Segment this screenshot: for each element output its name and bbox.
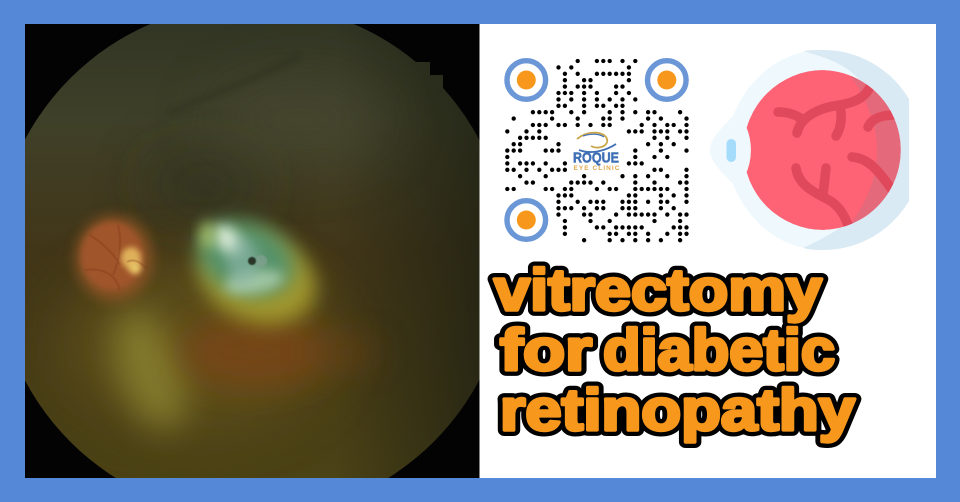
title outline: diabetic xyxy=(603,318,835,383)
title outline: for xyxy=(500,318,592,383)
optic disc xyxy=(75,215,153,301)
QR finder: bottom left xyxy=(507,201,546,239)
QR code xyxy=(507,61,686,240)
Roque Eye Clinic logo xyxy=(571,130,622,172)
yellow haze xyxy=(99,301,201,439)
title fill: retinopathy xyxy=(500,378,855,443)
title outline: retinopathy xyxy=(500,378,855,443)
title fill: diabetic xyxy=(603,318,835,383)
QR data dots xyxy=(507,61,686,240)
dark retinal vessel xyxy=(170,55,300,112)
Roque Eye Clinic logo: EYE CLINIC xyxy=(574,165,620,172)
title fill xyxy=(494,258,855,443)
panel: white content area xyxy=(480,24,936,478)
panel: fundus photograph xyxy=(25,24,480,478)
Roque Eye Clinic logo: ROQUE xyxy=(573,150,619,166)
icon: eye with retinal vessels xyxy=(710,50,923,250)
title fill: for xyxy=(500,318,592,383)
title outline: vitrectomy xyxy=(494,258,822,323)
QR finder: top right xyxy=(648,61,686,99)
title fill: vitrectomy xyxy=(494,258,822,323)
retina xyxy=(746,70,901,230)
title outline xyxy=(494,258,855,443)
QR finder: top left xyxy=(507,61,546,99)
title xyxy=(494,258,855,443)
orange haze xyxy=(180,316,330,388)
vessels xyxy=(778,87,895,225)
pupil window xyxy=(726,139,736,162)
eyeball shadow crescent xyxy=(804,50,909,250)
macula xyxy=(186,206,329,340)
